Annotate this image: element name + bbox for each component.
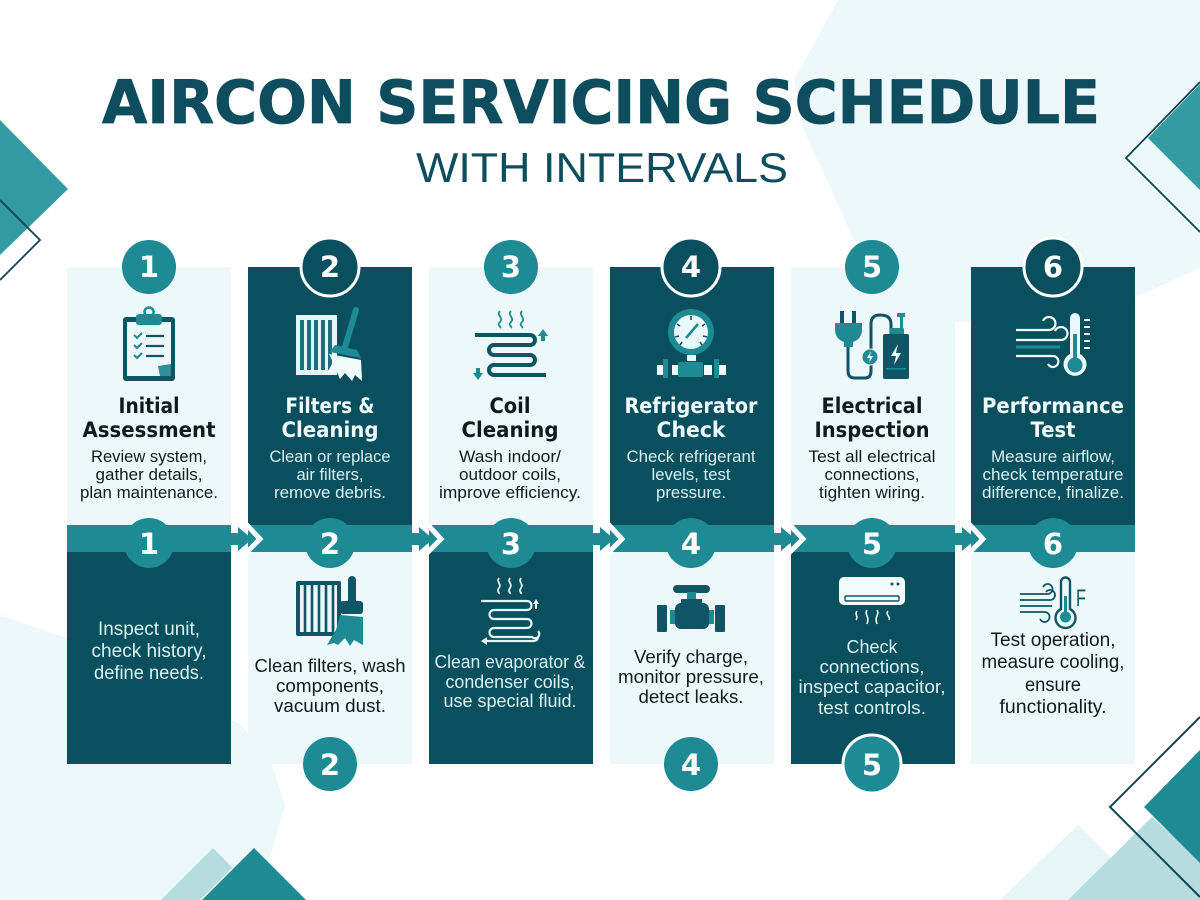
description — [626, 447, 756, 502]
panel: step 6 top — [971, 238, 1135, 527]
band number 6: 6 — [1043, 527, 1063, 561]
band number 2: 2 — [320, 527, 340, 561]
decoration: bottom right diamonds — [1000, 717, 1200, 900]
description: Test all electrical — [808, 447, 936, 466]
band number 6 — [1028, 518, 1078, 568]
description — [982, 630, 1124, 718]
icon: wind, thermometer, fahrenheit — [1020, 578, 1086, 628]
band number 5: 5 — [862, 527, 882, 561]
description: Verify charge, — [634, 647, 748, 667]
description: components, — [276, 676, 384, 696]
number badge 5 — [845, 240, 899, 294]
number badge 6 — [1024, 238, 1082, 296]
panel: step 4 top — [610, 238, 774, 527]
heading: Coil — [490, 394, 530, 418]
description: plan maintenance. — [80, 483, 218, 502]
heading: Filters & — [286, 394, 374, 418]
icon: filter and brush — [296, 310, 362, 381]
panel: step 1 top — [67, 240, 231, 527]
number badge 5 — [843, 735, 901, 793]
description — [80, 447, 218, 502]
heading: Refrigerator — [624, 394, 758, 418]
description: detect leaks. — [638, 687, 744, 707]
arrow 3 to 4 — [593, 523, 622, 554]
band number 2 — [305, 518, 355, 568]
icon: pressure gauge — [657, 309, 726, 378]
number badge 2 — [303, 737, 357, 791]
description: improve efficiency. — [439, 483, 581, 502]
number badge 1 — [122, 240, 176, 294]
timeline band with numbers and arrows — [67, 518, 1135, 568]
number badge 6: 6 — [1043, 250, 1063, 284]
band number 1 — [124, 518, 174, 568]
description: inspect capacitor, — [798, 677, 946, 697]
description: functionality. — [1000, 697, 1106, 718]
description: monitor pressure, — [618, 667, 764, 687]
description: difference, finalize. — [982, 483, 1124, 502]
decoration: bottom triangles — [161, 846, 308, 900]
number badge 2: 2 — [320, 748, 340, 782]
panel: step 2 top — [248, 238, 412, 527]
panel: step 5 bottom — [791, 552, 955, 793]
heading — [462, 394, 558, 442]
description — [808, 447, 936, 502]
number badge 4 — [662, 238, 720, 296]
description: ensure — [1025, 675, 1081, 696]
number badge 2: 2 — [320, 250, 340, 284]
description: Check — [846, 637, 898, 657]
decoration: top right diamond — [1126, 82, 1200, 232]
icon: clipboard — [123, 308, 175, 381]
number badge 5: 5 — [862, 748, 882, 782]
description: condenser coils, — [446, 672, 574, 692]
description: check history, — [92, 641, 206, 662]
description: Clean evaporator & — [434, 652, 586, 672]
description — [92, 619, 206, 684]
number badge 1: 1 — [139, 250, 159, 284]
description: air filters, — [296, 465, 364, 484]
band number 4: 4 — [681, 527, 701, 561]
panel: step 6 bottom — [971, 552, 1135, 764]
panel: step 4 bottom — [610, 552, 774, 791]
decoration: left diamond — [0, 120, 68, 280]
description: outdoor coils, — [459, 465, 561, 484]
heading: Performance — [982, 394, 1124, 418]
arrow 4 to 5 — [774, 523, 803, 554]
description — [439, 447, 581, 502]
number badge 5: 5 — [862, 250, 882, 284]
description: use special fluid. — [444, 691, 576, 711]
description: vacuum dust. — [274, 696, 386, 716]
description: gather details, — [96, 465, 202, 484]
heading: Test — [1030, 418, 1076, 442]
description — [618, 647, 764, 707]
description: levels, test — [652, 465, 731, 484]
description: Measure airflow, — [991, 447, 1115, 466]
heading — [624, 394, 758, 442]
number badge 4: 4 — [681, 748, 701, 782]
heading — [282, 394, 378, 442]
icon: coil — [481, 578, 539, 645]
panel: step 5 top — [791, 240, 955, 527]
description: connections, — [820, 657, 924, 677]
panel: step 1 bottom — [67, 552, 231, 764]
description: test controls. — [818, 698, 926, 718]
panel: step 2 bottom — [248, 552, 412, 791]
heading: Cleaning — [462, 418, 558, 442]
number badge 4: 4 — [681, 250, 701, 284]
subtitle: WITH INTERVALS — [416, 144, 788, 191]
band number 1: 1 — [139, 527, 159, 561]
description: check temperature — [982, 465, 1124, 484]
heading: Check — [656, 418, 726, 442]
description: connections, — [824, 465, 920, 484]
arrow 5 to 6 — [955, 523, 983, 554]
description: tighten wiring. — [819, 483, 925, 502]
icon: filter and brush — [296, 580, 363, 646]
icon: wind and thermometer — [1016, 313, 1090, 376]
number badge 2 — [301, 238, 359, 296]
heading: Electrical — [822, 394, 922, 418]
panel: step 3 bottom — [429, 552, 593, 764]
arrow 1 to 2 — [231, 523, 260, 554]
description — [434, 652, 586, 711]
description: Check refrigerant — [626, 447, 756, 466]
description: define needs. — [94, 663, 204, 684]
icon: coil — [473, 311, 548, 380]
description: measure cooling, — [982, 652, 1124, 673]
number badge 3: 3 — [501, 250, 521, 284]
band number 3 — [486, 518, 536, 568]
description — [270, 447, 390, 502]
heading: Initial — [118, 394, 180, 418]
description: Clean filters, wash — [254, 656, 406, 676]
title: AIRCON SERVICING SCHEDULE — [102, 68, 1100, 138]
heading: Inspection — [814, 418, 930, 442]
description: pressure. — [656, 483, 726, 502]
description: Review system, — [91, 447, 207, 466]
description — [982, 447, 1124, 502]
heading — [982, 394, 1124, 442]
description: Clean or replace — [270, 447, 390, 466]
description — [798, 637, 946, 718]
heading: Cleaning — [282, 418, 378, 442]
band number 4 — [666, 518, 716, 568]
band number 3: 3 — [501, 527, 521, 561]
band number 5 — [847, 518, 897, 568]
description: Inspect unit, — [98, 619, 200, 640]
icon: valve — [657, 585, 725, 632]
heading — [82, 394, 216, 442]
icon: wind, thermometer, fahrenheit: F — [1076, 585, 1086, 612]
description: Test operation, — [990, 630, 1116, 651]
description: Wash indoor/ — [459, 447, 561, 466]
heading: Assessment — [82, 418, 216, 442]
heading — [814, 394, 930, 442]
icon: plug and battery — [835, 311, 909, 379]
description — [254, 656, 406, 716]
arrow 2 to 3 — [412, 523, 441, 554]
number badge 3 — [484, 240, 538, 294]
panel: step 3 top — [429, 240, 593, 527]
description: remove debris. — [274, 483, 386, 502]
number badge 4 — [664, 737, 718, 791]
icon: air conditioner — [839, 577, 905, 624]
